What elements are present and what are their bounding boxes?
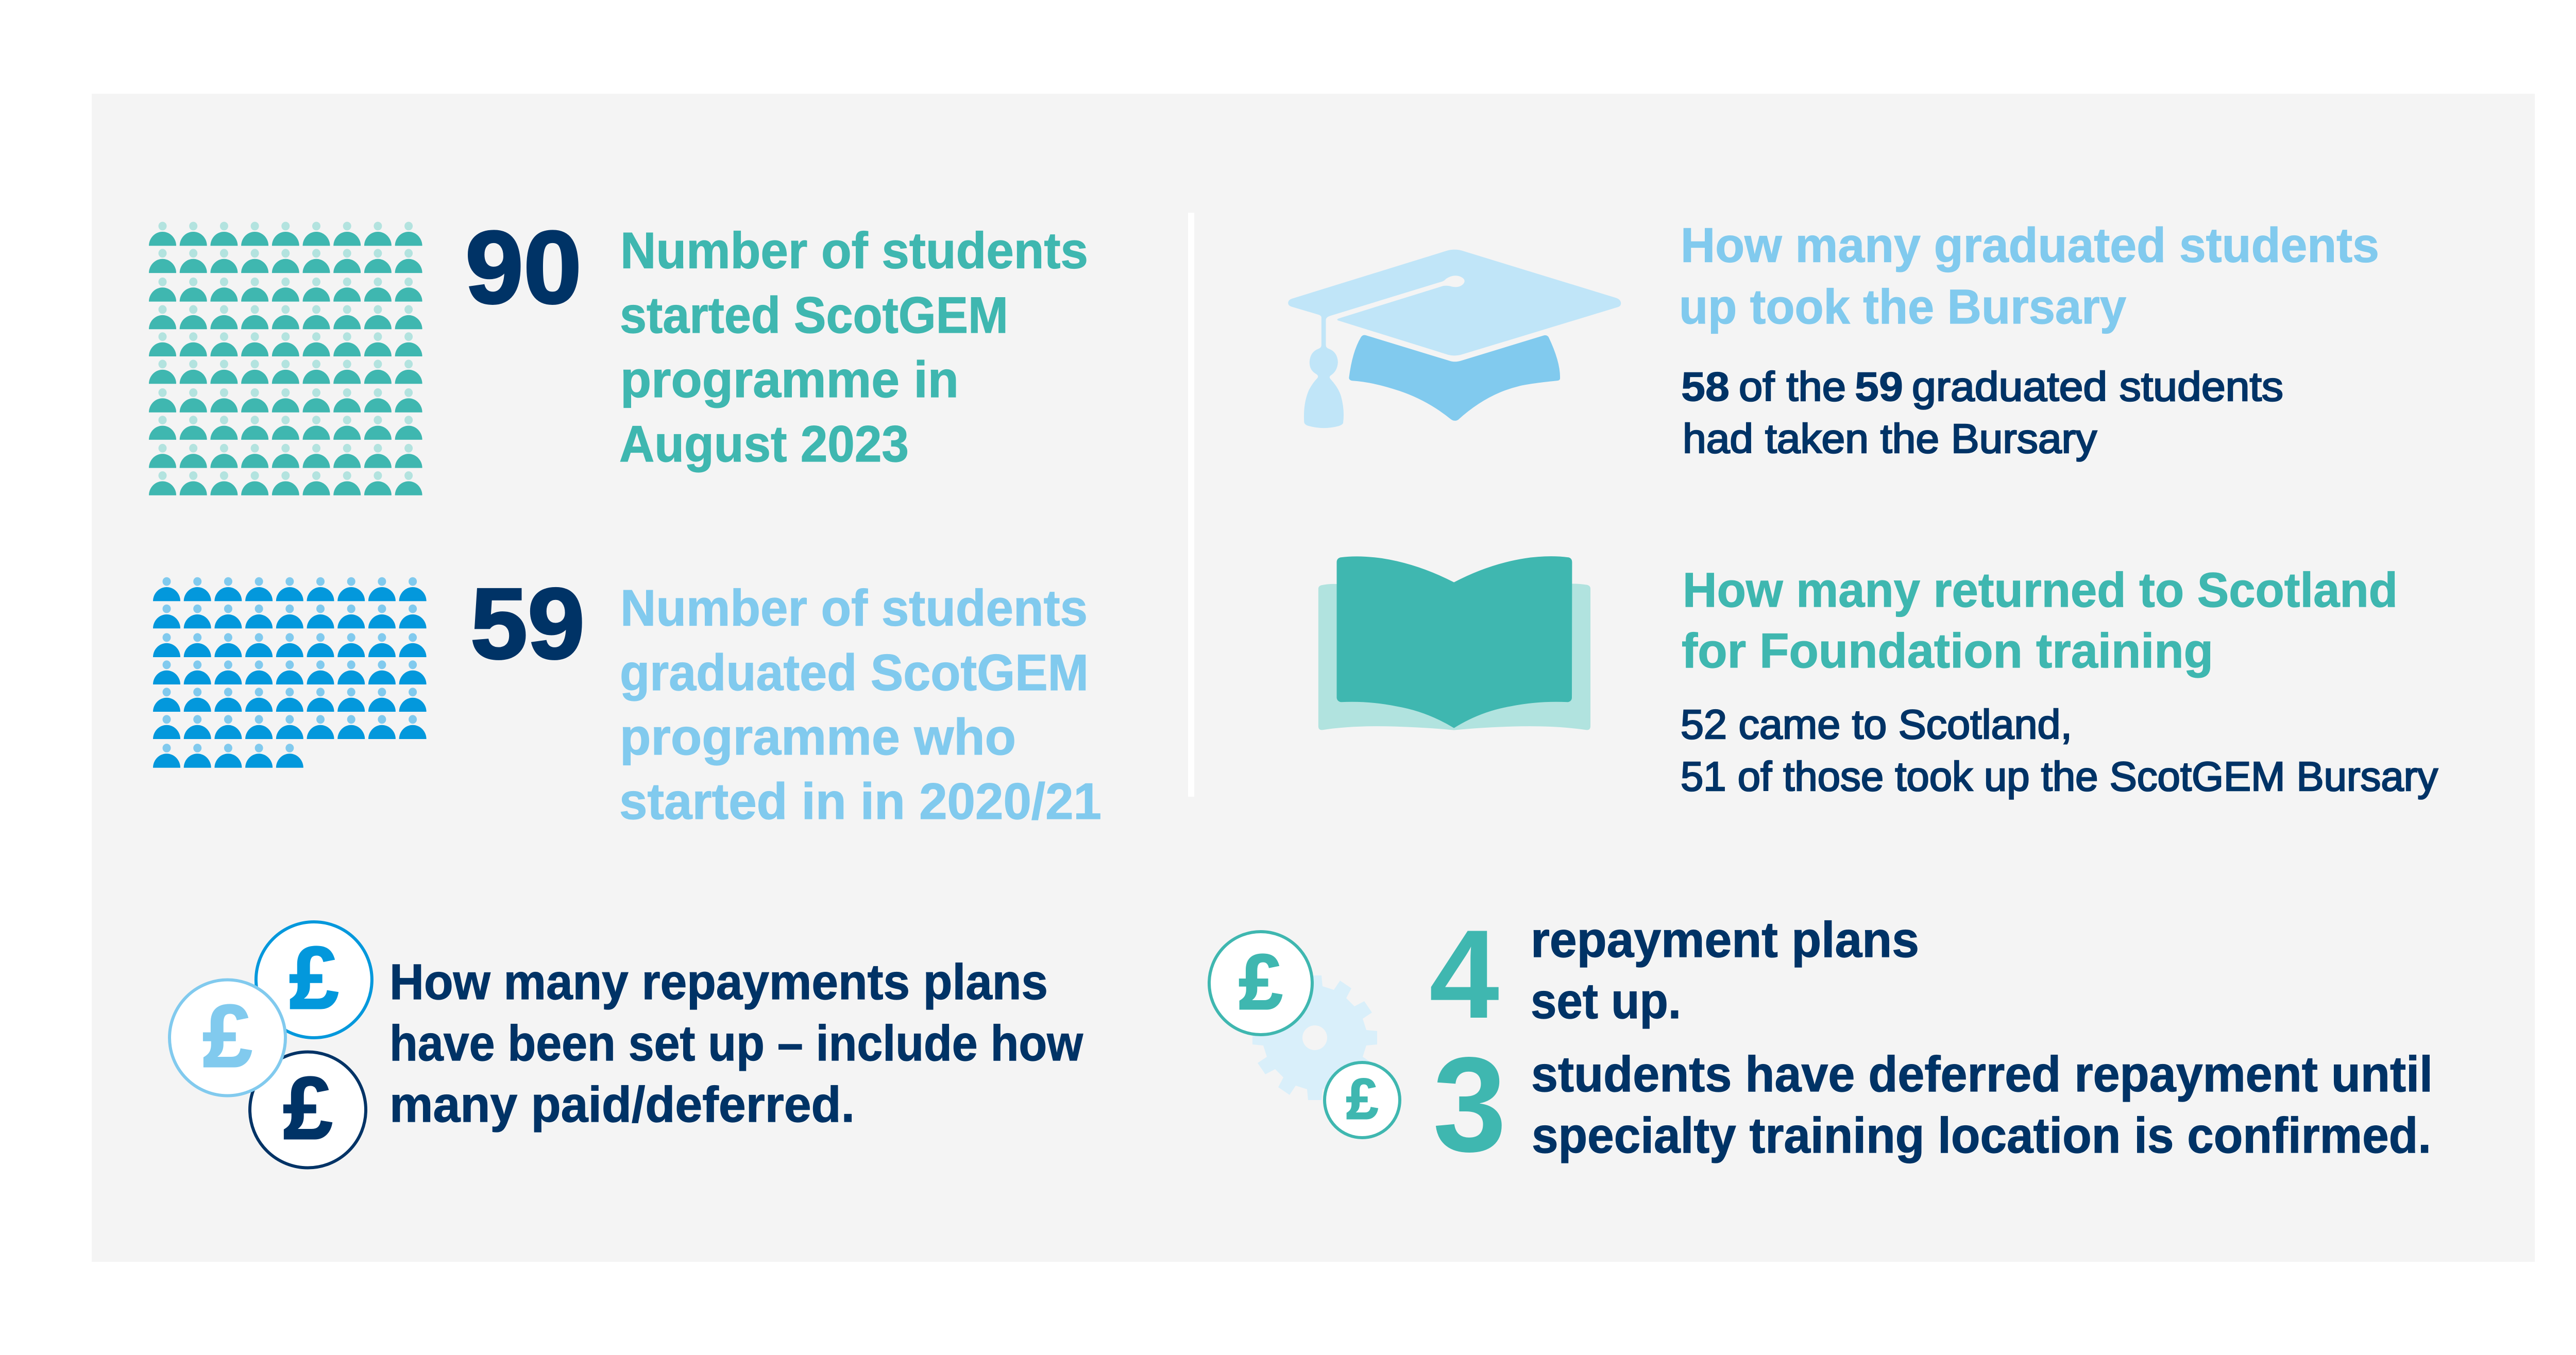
icon: gear with pound coins — [1209, 932, 1400, 1138]
number: 90: 90 — [465, 210, 582, 325]
text: deferred repayment — [1531, 1046, 2433, 1163]
coin: large teal: £ — [1239, 938, 1282, 1026]
text: foundation training detail: 52 came to Scotland, — [1681, 701, 2072, 747]
panel: students started — [149, 210, 1088, 495]
text: students graduated description: graduated ScotGEM — [620, 644, 1089, 701]
coin: small teal: £ — [1346, 1067, 1378, 1131]
pictogram: 59 blue people — [153, 577, 427, 768]
coin: navy: £ — [283, 1059, 332, 1158]
text: repayment plans question line three: many paid/deferred. — [389, 1076, 855, 1133]
text: repayment plans question: How many repayments plans — [389, 954, 1048, 1010]
text: foundation training heading — [1682, 563, 2398, 678]
coin: mid blue — [256, 922, 372, 1038]
text: bursary detail: 59 — [1855, 364, 1903, 409]
coin: light blue: £ — [203, 987, 252, 1086]
text: bursary heading: up took the Bursary — [1679, 280, 2126, 334]
text: bursary heading — [1679, 218, 2379, 334]
text: students graduated description: Number of students — [620, 579, 1088, 637]
text: bursary heading: How many graduated students — [1681, 218, 2379, 273]
text: foundation training heading: How many returned to Scotland — [1683, 563, 2398, 618]
text: repayment plans set up: repayment plans — [1531, 912, 1919, 968]
text: repayment plans question line two: have been set up – include how — [389, 1015, 1083, 1071]
icon: open book — [1318, 556, 1590, 730]
gear — [1252, 975, 1377, 1100]
coin: large teal — [1209, 932, 1312, 1035]
text: students graduated description: started in in 2020/21 — [619, 773, 1101, 830]
coin: small teal — [1325, 1062, 1400, 1138]
vertical divider — [1188, 213, 1194, 797]
text: students started description: started ScotGEM — [620, 286, 1008, 344]
text: students graduated description: programme who — [620, 708, 1016, 765]
text: repayment plans set up: set up. — [1531, 973, 1681, 1029]
text: bursary detail: had taken the Bursary — [1683, 416, 2097, 461]
text: bursary detail — [1681, 364, 2283, 461]
icon: graduation cap — [1288, 250, 1621, 428]
panel: students graduated — [153, 568, 1101, 830]
text: bursary detail: of the — [1739, 364, 1846, 409]
text: bursary detail: 58 — [1681, 364, 1730, 409]
text: foundation training detail — [1681, 701, 2438, 799]
text: students started description: Number of students — [620, 222, 1088, 279]
text: deferred repayment: students have deferred repayment until — [1531, 1046, 2433, 1102]
number: 59: 59 — [470, 568, 585, 680]
text: repayment plans set up — [1531, 912, 1919, 1029]
number: 4: 4 — [1429, 903, 1499, 1044]
text: deferred repayment: specialty training location is confirmed. — [1532, 1107, 2431, 1163]
text: foundation training heading: for Foundation training — [1682, 624, 2213, 678]
pictogram: 90 teal people — [149, 222, 422, 495]
coin: navy — [250, 1052, 366, 1168]
coin: mid blue: £ — [290, 929, 338, 1027]
text: bursary detail: graduated students — [1912, 364, 2283, 409]
icon: three pound coins — [170, 922, 372, 1168]
text: students started description: programme in — [620, 351, 959, 408]
text: students started description: August 2023 — [619, 415, 909, 472]
coin: light blue — [170, 980, 285, 1096]
text: students started description — [619, 222, 1088, 472]
number: 3: 3 — [1433, 1029, 1506, 1180]
text: foundation training detail: 51 of those took up the ScotGEM Bursary — [1681, 753, 2438, 799]
text: students graduated description — [619, 579, 1101, 830]
